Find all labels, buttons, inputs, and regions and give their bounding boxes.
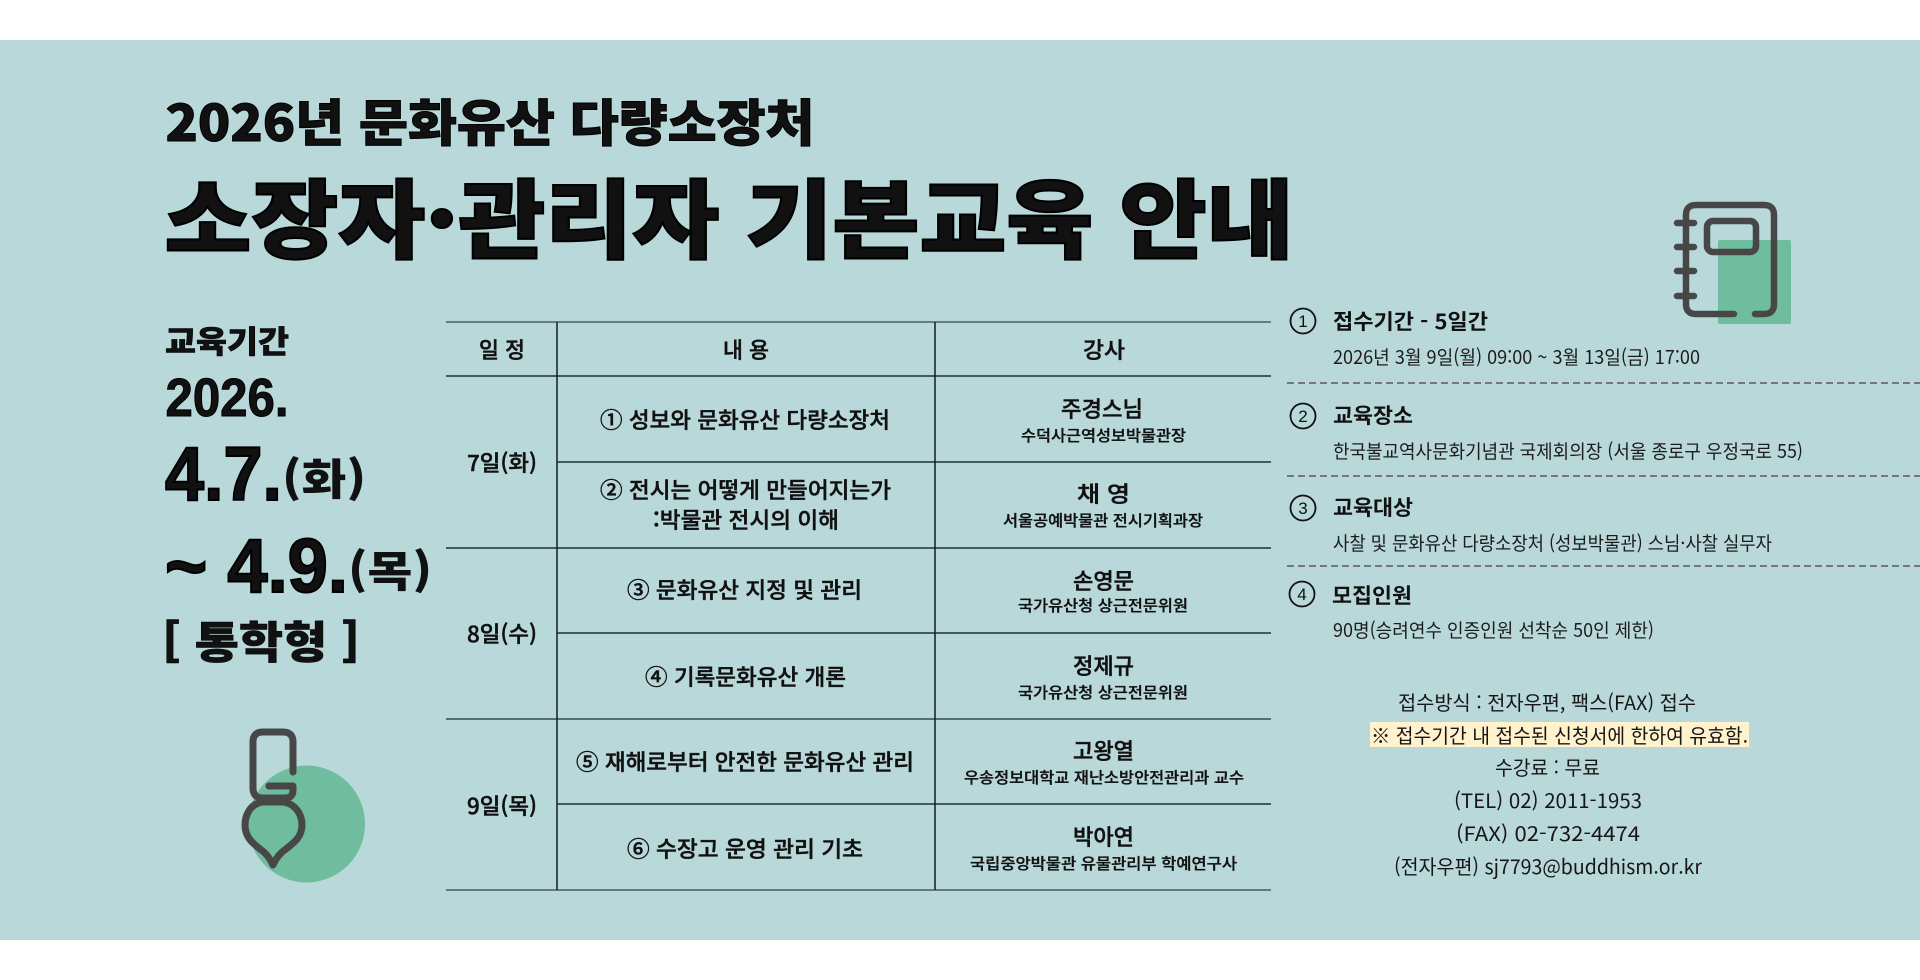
start weekday: (화) xyxy=(282,446,366,508)
info list xyxy=(1287,306,1920,643)
contact block xyxy=(1370,687,1749,880)
row 1: 주경스님 xyxy=(1061,392,1143,424)
row 5 xyxy=(576,734,1244,788)
row 3: 손영문 xyxy=(1073,564,1134,596)
email: (전자우편) sj7793@buddhism.or.kr xyxy=(1394,851,1702,880)
item 1: application period: 2026년 3월 9일(월) 09:00 ~ 3월 13일(금) 17:00 xyxy=(1333,343,1700,370)
item 3: audience: 사찰 및 문화유산 다량소장처 (성보박물관) 스님·사찰 실무자 xyxy=(1333,529,1772,556)
row 3 xyxy=(627,564,1188,616)
education period block xyxy=(162,317,432,671)
row 1: 수덕사근역성보박물관장 xyxy=(1021,424,1186,446)
row 1 xyxy=(600,392,1186,446)
application method: 접수방식 : 전자우편, 팩스(FAX) 접수 xyxy=(1398,687,1696,716)
start date: 4.7. xyxy=(165,432,282,517)
item 3: audience: 교육대상 xyxy=(1333,492,1413,522)
end weekday: (목) xyxy=(348,538,432,600)
row 5: 고왕열 xyxy=(1073,734,1134,766)
schedule table xyxy=(446,322,1271,890)
item 1: application period: 1 xyxy=(1298,312,1308,331)
item 1: application period: 접수기간 - 5일간 xyxy=(1333,306,1488,336)
item 2: venue xyxy=(1290,400,1803,464)
table header: 일 정 xyxy=(479,333,525,365)
item 3: audience: 3 xyxy=(1298,499,1308,518)
year: 2026. xyxy=(166,368,288,428)
item 4: capacity: 90명(승려연수 인증인원 선착순 50인 제한) xyxy=(1333,616,1654,643)
item 2: venue: 2 xyxy=(1298,407,1308,426)
row 2: 서울공예박물관 전시기획과장 xyxy=(1003,509,1203,531)
tuition: 수강료 : 무료 xyxy=(1495,752,1600,781)
row 3: ③ 문화유산 지정 및 관리 xyxy=(627,573,862,605)
day labels: 7일(화) xyxy=(467,446,537,478)
table header: 내 용 xyxy=(723,333,769,365)
row 2: 채 영 xyxy=(1077,477,1130,509)
row 3: 국가유산청 상근전문위원 xyxy=(1018,594,1188,616)
row 2: ② 전시는 어떻게 만들어지는가 xyxy=(600,473,891,505)
item 4: capacity: 모집인원 xyxy=(1332,580,1412,610)
row 5: ⑤ 재해로부터 안전한 문화유산 관리 xyxy=(576,745,914,777)
row 4: ④ 기록문화유산 개론 xyxy=(645,660,846,692)
heading line 1: 2026년 문화유산 다량소장처 xyxy=(166,84,814,156)
row 6: 국립중앙박물관 유물관리부 학예연구사 xyxy=(970,852,1237,874)
day labels: 9일(목) xyxy=(467,789,537,821)
row 5: 우송정보대학교 재난소방안전관리과 교수 xyxy=(964,766,1244,788)
course type: [ 통학형 ] xyxy=(162,607,360,671)
telephone: (TEL) 02) 2011-1953 xyxy=(1454,785,1642,814)
row 4: 정제규 xyxy=(1073,649,1134,681)
day labels xyxy=(467,446,537,821)
period label: 교육기간 xyxy=(165,317,289,362)
row 1: ① 성보와 문화유산 다량소장처 xyxy=(600,403,890,435)
row 4: 국가유산청 상근전문위원 xyxy=(1018,681,1188,703)
item 1: application period xyxy=(1290,306,1700,370)
title xyxy=(164,84,1294,276)
row 2: :박물관 전시의 이해 xyxy=(653,503,839,535)
row 6 xyxy=(627,820,1237,874)
end date: ~ 4.9. xyxy=(165,524,348,609)
table header: 강사 xyxy=(1083,333,1125,365)
item 3: audience xyxy=(1290,492,1772,556)
item 4: capacity: 4 xyxy=(1297,585,1307,604)
icon: notebook xyxy=(1677,205,1791,324)
item 2: venue: 교육장소 xyxy=(1333,400,1413,430)
icon: brush tip xyxy=(245,732,365,882)
highlighted note: ※ 접수기간 내 접수된 신청서에 한하여 유효함. xyxy=(1371,720,1748,749)
item 4: capacity xyxy=(1290,580,1654,643)
row 2 xyxy=(600,473,1203,535)
row 4 xyxy=(645,649,1188,703)
fax: (FAX) 02-732-4474 xyxy=(1456,818,1640,847)
day labels: 8일(수) xyxy=(467,617,537,649)
row 6: ⑥ 수장고 운영 관리 기초 xyxy=(627,832,863,864)
item 2: venue: 한국불교역사문화기념관 국제회의장 (서울 종로구 우정국로 55) xyxy=(1333,437,1803,464)
heading line 2: 소장자·관리자 기본교육 안내 xyxy=(164,151,1294,276)
table header xyxy=(479,333,1125,365)
row 6: 박아연 xyxy=(1073,820,1134,852)
